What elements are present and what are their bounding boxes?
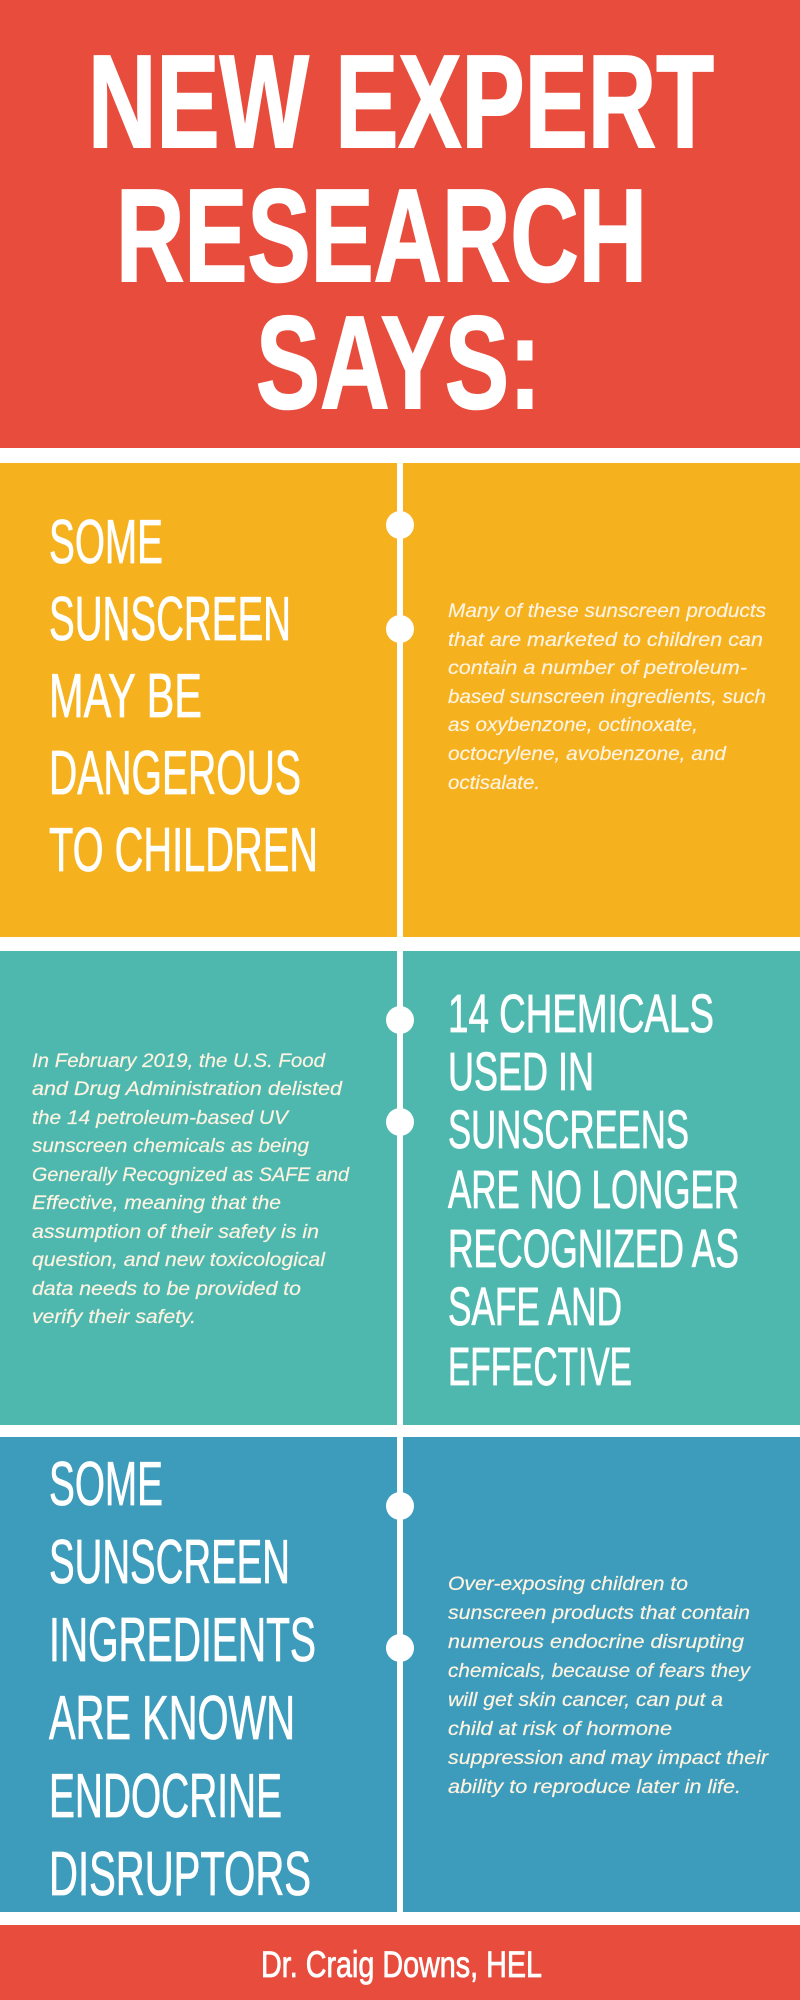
body text: FDA delisting: In February 2019, the U.S. Food bbox=[32, 1051, 327, 1072]
body text: over-exposing children: ability to reproduce later in life. bbox=[448, 1777, 741, 1798]
heading: endocrine disruptors: SUNSCREEN bbox=[49, 1528, 290, 1597]
title bbox=[88, 28, 714, 436]
body text: FDA delisting: Generally Recognized as SAFE and bbox=[32, 1165, 350, 1186]
heading: some sunscreen may be dangerous bbox=[49, 508, 318, 885]
heading: 14 chemicals no longer safe bbox=[448, 984, 739, 1397]
body text: petroleum ingredients: that are marketed to children can bbox=[448, 630, 763, 651]
body text: FDA delisting: the 14 petroleum-based UV bbox=[32, 1108, 291, 1129]
body text: FDA delisting: verify their safety. bbox=[32, 1307, 196, 1328]
panel: dangerous to children bbox=[0, 463, 800, 937]
heading: endocrine disruptors bbox=[49, 1450, 316, 1909]
body text: FDA delisting: question, and new toxicological bbox=[32, 1250, 326, 1271]
body text: petroleum ingredients: as oxybenzone, octinoxate, bbox=[448, 715, 698, 736]
heading: endocrine disruptors: INGREDIENTS bbox=[49, 1606, 316, 1675]
heading: some sunscreen may be dangerous: TO CHILDREN bbox=[49, 816, 318, 885]
heading: 14 chemicals no longer safe: USED IN bbox=[448, 1042, 594, 1102]
body text: over-exposing children: will get skin cancer, can put a bbox=[448, 1690, 723, 1711]
body text: over-exposing children: child at risk of hormone bbox=[448, 1719, 672, 1740]
body text: over-exposing children: suppression and may impact their bbox=[448, 1748, 769, 1769]
heading: some sunscreen may be dangerous: SUNSCREEN bbox=[49, 585, 291, 654]
header banner bbox=[0, 0, 800, 448]
heading: endocrine disruptors: DISRUPTORS bbox=[49, 1840, 311, 1909]
body text: petroleum ingredients: octisalate. bbox=[448, 773, 540, 794]
body text: FDA delisting: and Drug Administration delisted bbox=[32, 1079, 344, 1100]
body text: over-exposing children: chemicals, because of fears they bbox=[448, 1661, 752, 1682]
body text: over-exposing children: Over-exposing children to bbox=[448, 1574, 688, 1595]
footer credit: Dr. Craig Downs, HEL bbox=[261, 1944, 542, 1985]
footer bbox=[0, 1925, 800, 2000]
body text: FDA delisting: assumption of their safety is in bbox=[32, 1222, 319, 1243]
body text: petroleum ingredients: Many of these sunscreen products bbox=[448, 601, 767, 622]
body text: over-exposing children: sunscreen products that contain bbox=[448, 1603, 750, 1624]
body text: FDA delisting: sunscreen chemicals as being bbox=[32, 1136, 309, 1157]
body text: FDA delisting bbox=[32, 1051, 350, 1328]
body text: petroleum ingredients: contain a number of petroleum- bbox=[448, 658, 747, 679]
panel: 14 chemicals bbox=[0, 951, 800, 1425]
heading: endocrine disruptors: SOME bbox=[49, 1450, 163, 1519]
body text: petroleum ingredients bbox=[448, 601, 767, 794]
panel: endocrine disruptors bbox=[0, 1437, 800, 1912]
body text: FDA delisting: data needs to be provided to bbox=[32, 1279, 301, 1300]
heading: 14 chemicals no longer safe: EFFECTIVE bbox=[448, 1337, 632, 1397]
heading: some sunscreen may be dangerous: DANGEROUS bbox=[49, 739, 301, 808]
body text: over-exposing children: numerous endocrine disrupting bbox=[448, 1632, 744, 1653]
heading: some sunscreen may be dangerous: MAY BE bbox=[49, 662, 202, 731]
heading: endocrine disruptors: ARE KNOWN bbox=[49, 1684, 295, 1753]
body text: petroleum ingredients: octocrylene, avobenzone, and bbox=[448, 744, 728, 765]
body text: over-exposing children bbox=[448, 1574, 769, 1798]
heading: 14 chemicals no longer safe: SAFE AND bbox=[448, 1277, 622, 1337]
heading: some sunscreen may be dangerous: SOME bbox=[49, 508, 163, 577]
body text: petroleum ingredients: based sunscreen ingredients, such bbox=[448, 687, 766, 708]
heading: endocrine disruptors: ENDOCRINE bbox=[49, 1762, 282, 1831]
title: SAYS: bbox=[256, 289, 541, 436]
body text: FDA delisting: Effective, meaning that the bbox=[32, 1193, 281, 1214]
